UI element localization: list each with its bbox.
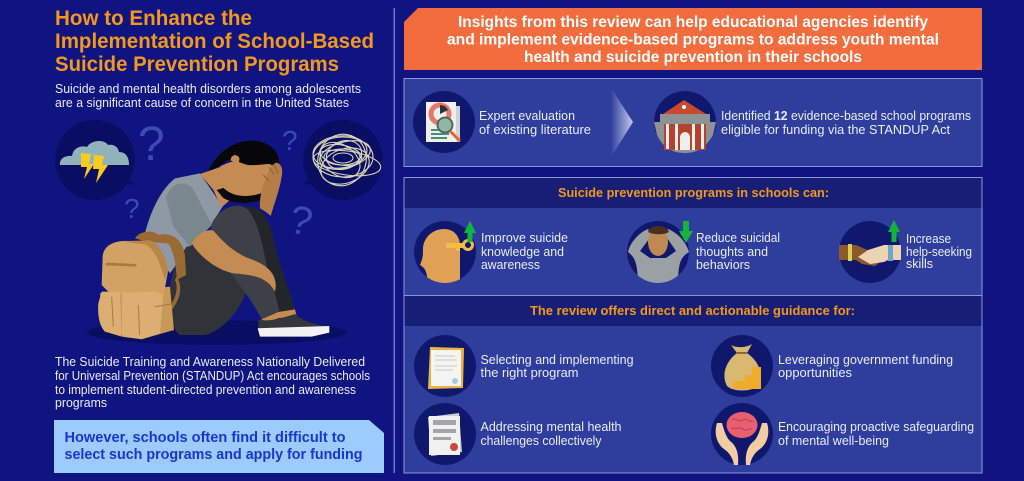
question marks [124, 118, 316, 245]
illustration: student with backpack [87, 141, 347, 345]
text: reduce thoughts: Reduce suicidal [696, 230, 780, 245]
text: reduce thoughts: thoughts and [696, 244, 768, 259]
text: improve knowledge [481, 230, 568, 272]
text: improve knowledge: knowledge and [481, 244, 564, 259]
text: reduce thoughts: behaviors [696, 257, 750, 272]
act description text: programs [55, 395, 107, 410]
arrow: chevron [611, 88, 633, 157]
title [55, 7, 374, 76]
text: addressing: challenges collectively [480, 433, 602, 448]
text: funding [778, 352, 953, 380]
icon: school building [654, 91, 716, 153]
text: identified programs: Identified 12 evidence-based school programs [721, 108, 971, 123]
text: help-seeking: Increase [906, 231, 951, 246]
text: expert evaluation [479, 108, 591, 137]
title: Implementation of School-Based [55, 30, 374, 53]
panel: suicide prevention programs [404, 178, 982, 296]
callout: difficulty for schools [54, 420, 384, 473]
act description text: to implement student-directed prevention and awareness [55, 382, 356, 397]
act description text: for Universal Prevention (STANDUP) Act encourages schools [55, 368, 370, 383]
text: safeguarding: Encouraging proactive safeguarding [778, 419, 974, 434]
callout: difficulty for schools: select such programs and apply for funding [64, 447, 362, 463]
text: help-seeking: skills [906, 256, 933, 271]
title: Suicide Prevention Programs [55, 53, 339, 76]
icon: tangled scribble thought bubble [303, 120, 383, 200]
text: identified programs [721, 108, 971, 137]
callout: difficulty for schools: However, schools often find it difficult to [64, 430, 346, 446]
intro text: are a significant cause of concern in the United States [55, 95, 349, 110]
icon: documents [414, 403, 476, 465]
icon: money bag [711, 335, 773, 397]
text: reduce thoughts [696, 230, 780, 272]
text: safeguarding [778, 419, 974, 448]
text: improve knowledge: Improve suicide [481, 230, 568, 245]
intro text: Suicide and mental health disorders among adolescents [55, 81, 361, 96]
text: funding: Leveraging government funding [778, 352, 953, 367]
icon: brain in hands [711, 403, 773, 465]
heading: guidance [404, 296, 982, 326]
icon: certificate [414, 335, 476, 397]
banner: insights: Insights from this review can help educational agencies identify [458, 14, 928, 31]
heading: guidance: The review offers direct and actionable guidance for: [530, 303, 855, 318]
panel: actionable guidance [404, 296, 982, 473]
text: expert evaluation: of existing literature [479, 122, 591, 137]
text: selecting: the right program [480, 365, 578, 380]
icon: distressed person [627, 221, 693, 283]
text: help-seeking: help-seeking [906, 244, 972, 259]
icon: storm cloud thought bubble [55, 120, 135, 200]
banner: insights: health and suicide prevention in their schools [524, 49, 862, 66]
question marks: ? [124, 193, 140, 224]
heading: programs can [404, 178, 982, 208]
text: addressing [480, 419, 622, 448]
text: identified programs: eligible for funding via the STANDUP Act [721, 122, 950, 137]
text: safeguarding: of mental well-being [778, 433, 889, 448]
banner: insights: and implement evidence-based programs to address youth mental [447, 32, 939, 48]
intro text [55, 81, 361, 110]
icon: head with key [414, 221, 476, 283]
panel: review process [404, 78, 982, 166]
heading: programs can: Suicide prevention programs in schools can: [558, 185, 829, 200]
text: funding: opportunities [778, 365, 852, 380]
text: selecting [480, 352, 634, 380]
text: expert evaluation: Expert evaluation [479, 108, 575, 123]
icon: literature evaluation [413, 91, 475, 153]
question marks: ? [285, 197, 316, 245]
text: improve knowledge: awareness [481, 257, 540, 272]
act description text [55, 354, 370, 410]
act description text: The Suicide Training and Awareness Nationally Delivered [55, 354, 365, 369]
question marks: ? [138, 118, 165, 171]
text: help-seeking [906, 231, 972, 271]
title: How to Enhance the [55, 7, 252, 30]
icon: handshake [839, 220, 901, 283]
banner: insights [404, 8, 982, 70]
question marks: ? [282, 125, 298, 156]
text: addressing: Addressing mental health [480, 419, 622, 434]
text: selecting: Selecting and implementing [480, 352, 634, 367]
